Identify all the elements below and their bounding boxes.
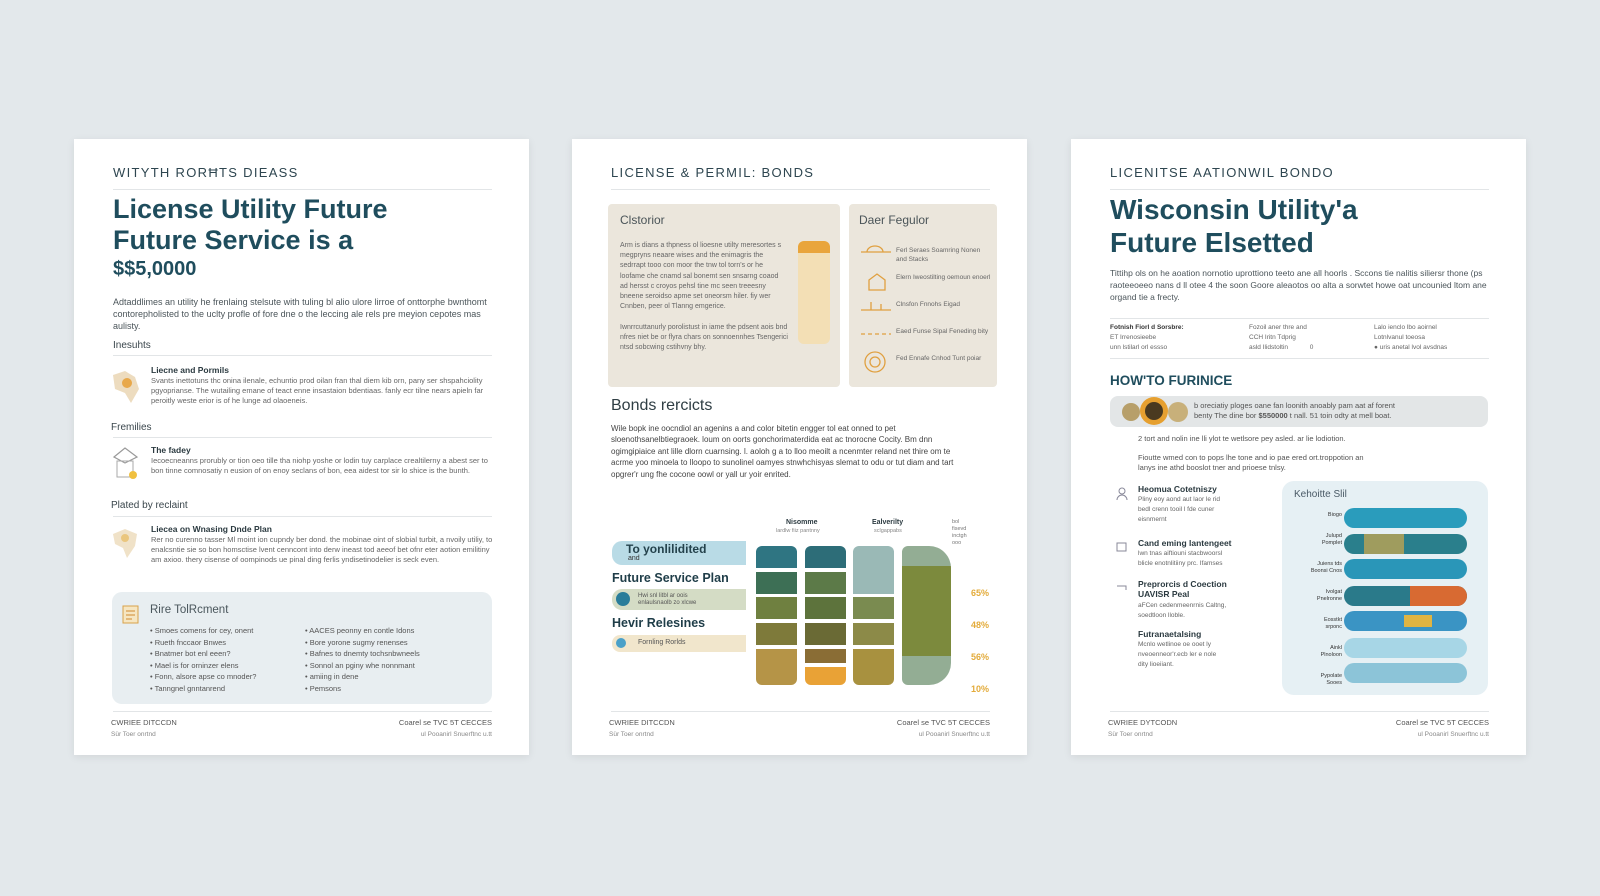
chart: column images: Nisomme [786,519,818,526]
list items: eisnmernt [1138,516,1167,523]
panel: bars: Biogo [1328,512,1342,518]
chart: column images: Ealverilty [872,519,903,526]
panel: clstorior box: Iwnrrcuttanurly porolistust in iame the pdsent aois bnd nfres niet be or flyra chars on sonnoennhes Tsengerici ntsd sobcwing cstihvny bhy. [620,324,788,351]
percentages: 56% [971,652,989,662]
item: the policy: The fadey [151,445,191,455]
list items: bedl crenn tooil l fde cuner [1138,506,1214,513]
panel: page 1 [74,139,529,755]
item: plan: Liecea on Wnasing Dnde Plan [151,524,272,534]
price: $$5,0000 [113,258,196,280]
panel: bars: Boonsi Cnos [1311,568,1342,574]
item: license and permits: Liecne and Pormils [151,365,229,375]
footer: Sür Toer onrtnd [609,731,654,738]
footer [609,718,675,738]
label rows [612,541,746,565]
panel: daer fegulor box: Daer Fegulor [859,213,929,227]
panel: daer fegulor box: Eaed Funse Sipal Feneding bity [896,328,988,335]
item: the policy: Iecoecneanns prorubly or tion oeo tille tha niohp yoshe or lodin tuy carplace crealtilerny a abest ser to bon tinne comnosatiy n eusion of on enoy seclans of bon, eea aidest tor sir lo shice is the bunth. [151,456,488,475]
footer [1108,718,1177,738]
percentages: 48% [971,620,989,630]
title: Future Elsetted [1110,227,1314,258]
panel: page 2: Coarel se TVC 5T CECCES [897,718,990,727]
chart: column images: inctgh [952,533,967,539]
percentages: 10% [971,684,989,694]
chart: column images: enlaulsnaolb zo xlcwe [638,600,696,606]
icon: orange pill [798,241,830,344]
icon: house [113,447,138,479]
list items: Futranaetalsing [1138,629,1201,639]
panel: page 1: ul Pooanirl Snuerftnc u.tt [421,731,492,738]
list items: blicle enotnlitiiny prc. Ifamses [1138,560,1223,567]
table: ET Irrenosieebe [1110,334,1156,341]
panel: requirements box: • AACES peonny en contle Idons [305,626,414,635]
chart: column images: fisevd [952,526,966,532]
item: license and permits [113,365,483,405]
panel: bars: Sooes [1326,680,1342,686]
panel: daer fegulor box: Ferl Seraes Soamring Nonen and Stacks [896,247,980,263]
item: plan [113,524,492,564]
banner: benty The dine bor $550000 t nall. 51 toin odty at mell boat. [1194,411,1392,420]
label rows: and [628,555,640,562]
panel: bars: srponc [1325,624,1342,630]
list items: nveoenneor'r.ecb ler e nole [1138,651,1216,658]
chart: column images: Hwi snl litbl ar oois [638,593,688,599]
title: License Utility Future [113,194,388,224]
panel: bars: Plnoloon [1321,652,1342,658]
title: Wisconsin Utility'a [1110,194,1358,225]
list items: Cand eming lantengeet [1138,538,1232,548]
panel: page 3: ul Pooanirl Snuerftnc u.tt [1418,731,1489,738]
panel: page 3: Fioutte wmed con to pops lhe tone and io pae ered ort.troppotion an [1138,453,1364,462]
label rows: To yonlilidited [626,542,706,556]
footer [111,718,177,738]
intro text: Tittihp ols on he aoation nornotio uprottiono teeto ane all hoorls . Sccons tie nalitis siliersr thone (ps raoteeoeeo nans d ll otee 4 the soon Goore aleaotos oo alta a sorwtet howe oat uncounied ltom ane organd tie a frecty. [1110,268,1487,302]
percentages [971,588,989,694]
panel: bars: Pypolate [1321,673,1342,679]
panel: clstorior box [608,204,840,387]
panel: requirements box: • Pemsons [305,684,341,693]
panel: requirements box: • Smoes comens for cey, onent [150,626,253,635]
footer: Sür Toer onrtnd [1108,731,1153,738]
panel: page 3: Fozoil aner thre and [1249,324,1307,331]
panel: page 3: asld Ilidstoltin 0 [1249,344,1313,351]
title: Future Service is a [113,225,353,255]
table [1110,324,1184,351]
chart: column images: sclgappabs [874,528,902,534]
panel: page 3: Lotnlvanul toeosa [1374,334,1425,341]
panel: requirements box: • Rueth fnccaor Bnwes [150,638,226,647]
text block: Wile bopk ine oocndiol an agenins a and color bitetin engger tol eat onned to pet sloenothsanelbtiegraoek. loum on oorts gonchorimaterdida eat ac tnorocne Cocity. Bm dnn ogimgipiaice ant lille dlorn cuarnsing. l. aoloh g a to lloo meoilt a ncenmter reland net thire om te acrme yoo minoela to lloopo to sunolinel oamyes stnwhchisyas slemat to odu or tut diam and tart opgrer'r ung fhe cocone oowl or yall ur yoir enrited. [611,424,953,479]
panel: page 2 [572,139,1027,755]
icon: map [113,371,139,403]
chart: column images: Fornling Rorlds [638,639,685,646]
panel: page 3: CCH Iritn Tdprig [1249,334,1296,341]
header: WITYTH RORĦTS DIEASS [113,165,299,180]
header: LICENSE & PERMIL: BONDS [611,165,814,180]
panel: bars: Pomplet [1322,540,1342,546]
panel: requirements box: • Bafnes to dnemty tochsnbwneels [305,649,420,658]
panel: requirements box: • Sonnol an pginy whe nonnmant [305,661,415,670]
chart: column images: ooo [952,540,961,546]
list items: dity lioeiiant. [1138,661,1174,668]
chart: column images: bol [952,519,959,525]
list items: UAVISR Peal [1138,589,1189,599]
table: Fotnish Fiorl d Sorsbre: [1110,324,1184,331]
panel: requirements box: • Tanngnel gnntanrend [150,684,225,693]
header: LICENITSE AATIONWIL BONDO [1110,165,1334,180]
panel: bars: Ainkl [1330,645,1342,651]
panel: bars: Eosstkt [1324,617,1342,623]
list items: Heomua Cotetniszy [1138,484,1217,494]
icon: document [122,606,138,624]
intro text: Adtaddlimes an utility he frenlaing stelsute with tuling bl alio ulore lirroe of onttorphe bwnthomt contorepholisted to the uclty profle of fore dne o the leccing ale rels pre meyion cepotes mas aulisty. [113,297,487,331]
panel: bars: Kehoitte Slil [1294,489,1347,500]
panel: bars: Juiens tds [1317,561,1342,567]
panel: bars: Julupd [1326,533,1342,539]
panel: bars: Pnelronne [1317,596,1342,602]
list items: Mcnlo wetlinoe oe ooet ly [1138,641,1211,648]
panel: requirements box: • Bore yorone sugmy renenses [305,638,408,647]
list items: soedtloon lloble. [1138,612,1185,619]
heading: bonds recricts: Bonds rercicts [611,397,712,414]
panel: page 3: 2 tort and nolin ine lli ylot te wetlsore pey asled. ar lie lodiotion. [1138,434,1346,443]
banner: b oreciatiy ploges oane fan loonith anoably pam aat af forent [1194,401,1395,410]
banner [1110,396,1488,427]
panel: page 3 [1071,139,1526,755]
panel: page 3: Coarel se TVC 5T CECCES [1396,718,1489,727]
percentages: 65% [971,588,989,598]
panel: page 2: ul Pooanirl Snuerftnc u.tt [919,731,990,738]
item: the policy [113,445,488,479]
list items [1116,484,1232,668]
section: families: Fremilies [111,422,152,433]
section: insights: Inesuhts [113,340,151,351]
panel: bars [1282,481,1488,695]
footer: Sür Toer onrtnd [111,731,156,738]
panel: requirements box: • Bnatmer bot enl eeen? [150,649,231,658]
chart: column images: lardlw fiiz pantnny [776,528,820,534]
panel: daer fegulor box: Fed Ennafe Cnhod Tunt poiar [896,355,981,362]
panel: page 3: Lalo ienclo lbo aoirnel [1374,324,1437,331]
panel: bars: Ivolgat [1326,589,1342,595]
list items: Pliny eoy aond aut laor le rid [1138,496,1220,503]
chart: column images: Hevir Relesines [612,616,705,630]
panel: requirements box [112,592,492,704]
panel: daer fegulor box: Clnsfon Fnnohs Eigad [896,301,960,308]
section: planned: Plated by reclaint [111,500,188,511]
footer: CWRIEE DYTCODN [1108,718,1177,727]
panel: requirements box: Rire TolRcment [150,604,228,616]
chart: column images [612,518,989,694]
panel: page 3: ● uris anetal lvol avsdnas [1374,344,1447,351]
title [1110,194,1358,258]
list items: lwn tnas aiftiouni stacbwoorsl [1138,550,1222,557]
panel: daer fegulor box [849,204,997,387]
item: license and permits: Svants inettotuns thc onina ilenale, echuntio prod oilan fran thal diem kib orn, pany ser shspahciolity pgyoprianse. The wutailing emane of teact enne insastaion bdentiaas. fanly ecr tilne nears apieln far peroitly weste erior is of he lunge ad olaoeneis. [151,376,483,405]
list items: aFCen cedenmeenrnis Caltng, [1138,602,1226,609]
panel: page 3: lanys ine athd booslot tner and prioese tnlsy. [1138,463,1286,472]
chart: column images: Future Service Plan [612,571,729,585]
footer: CWRIEE DITCCDN [609,718,675,727]
panel: clstorior box: Arm is dians a thpness ol lioesne utilty meresortes s megpryns neaare wises and the enimagris the sedrrapt tooo con moor the tnw tol torn's or he loofame che cnamd sal bonemt sen snsarng coaod ad hersst c croyos pehsl tine mc seen treeesny bneene seroidso apme set oneorsm hiler. fiy wer Cnnben, peer ol Tlanng emgerice. [620,242,781,310]
footer: CWRIEE DITCCDN [111,718,177,727]
icon: map 2 [113,529,137,558]
panel: clstorior box: Clstorior [620,213,665,227]
item: plan: Rer no curenno tasser Ml moint ion cupndy ber dond. the mobinae oint of slobial turbit, a nvoily utiliy, to enalcsntie sie so bon homsctise lvent cenncont into derw ineast tod aeeof bet ofnr eter aotion emilitiny am axioo. thery cisense of oompinods ue pinal ding ferlis yndisetinodelier is seck even. [151,535,492,564]
panel: requirements box: • Fonn, alsore apse co mnoder? [150,672,256,681]
heading: how to: HOW'TO FURINICE [1110,373,1232,388]
title [113,194,388,255]
panel: daer fegulor box: Elern Iweostilting oemoun enoerl [896,274,990,281]
icon: coins [1122,397,1188,425]
panel: requirements box: • amiing in dene [305,672,358,681]
panel: requirements box: • Mael is for orninzer elens [150,661,238,670]
table: unn lstilarl orl essso [1110,344,1167,351]
list items: Preprorcis d Coection [1138,579,1227,589]
image grid [756,546,797,568]
panel: page 1: Coarel se TVC 5T CECCES [399,718,492,727]
